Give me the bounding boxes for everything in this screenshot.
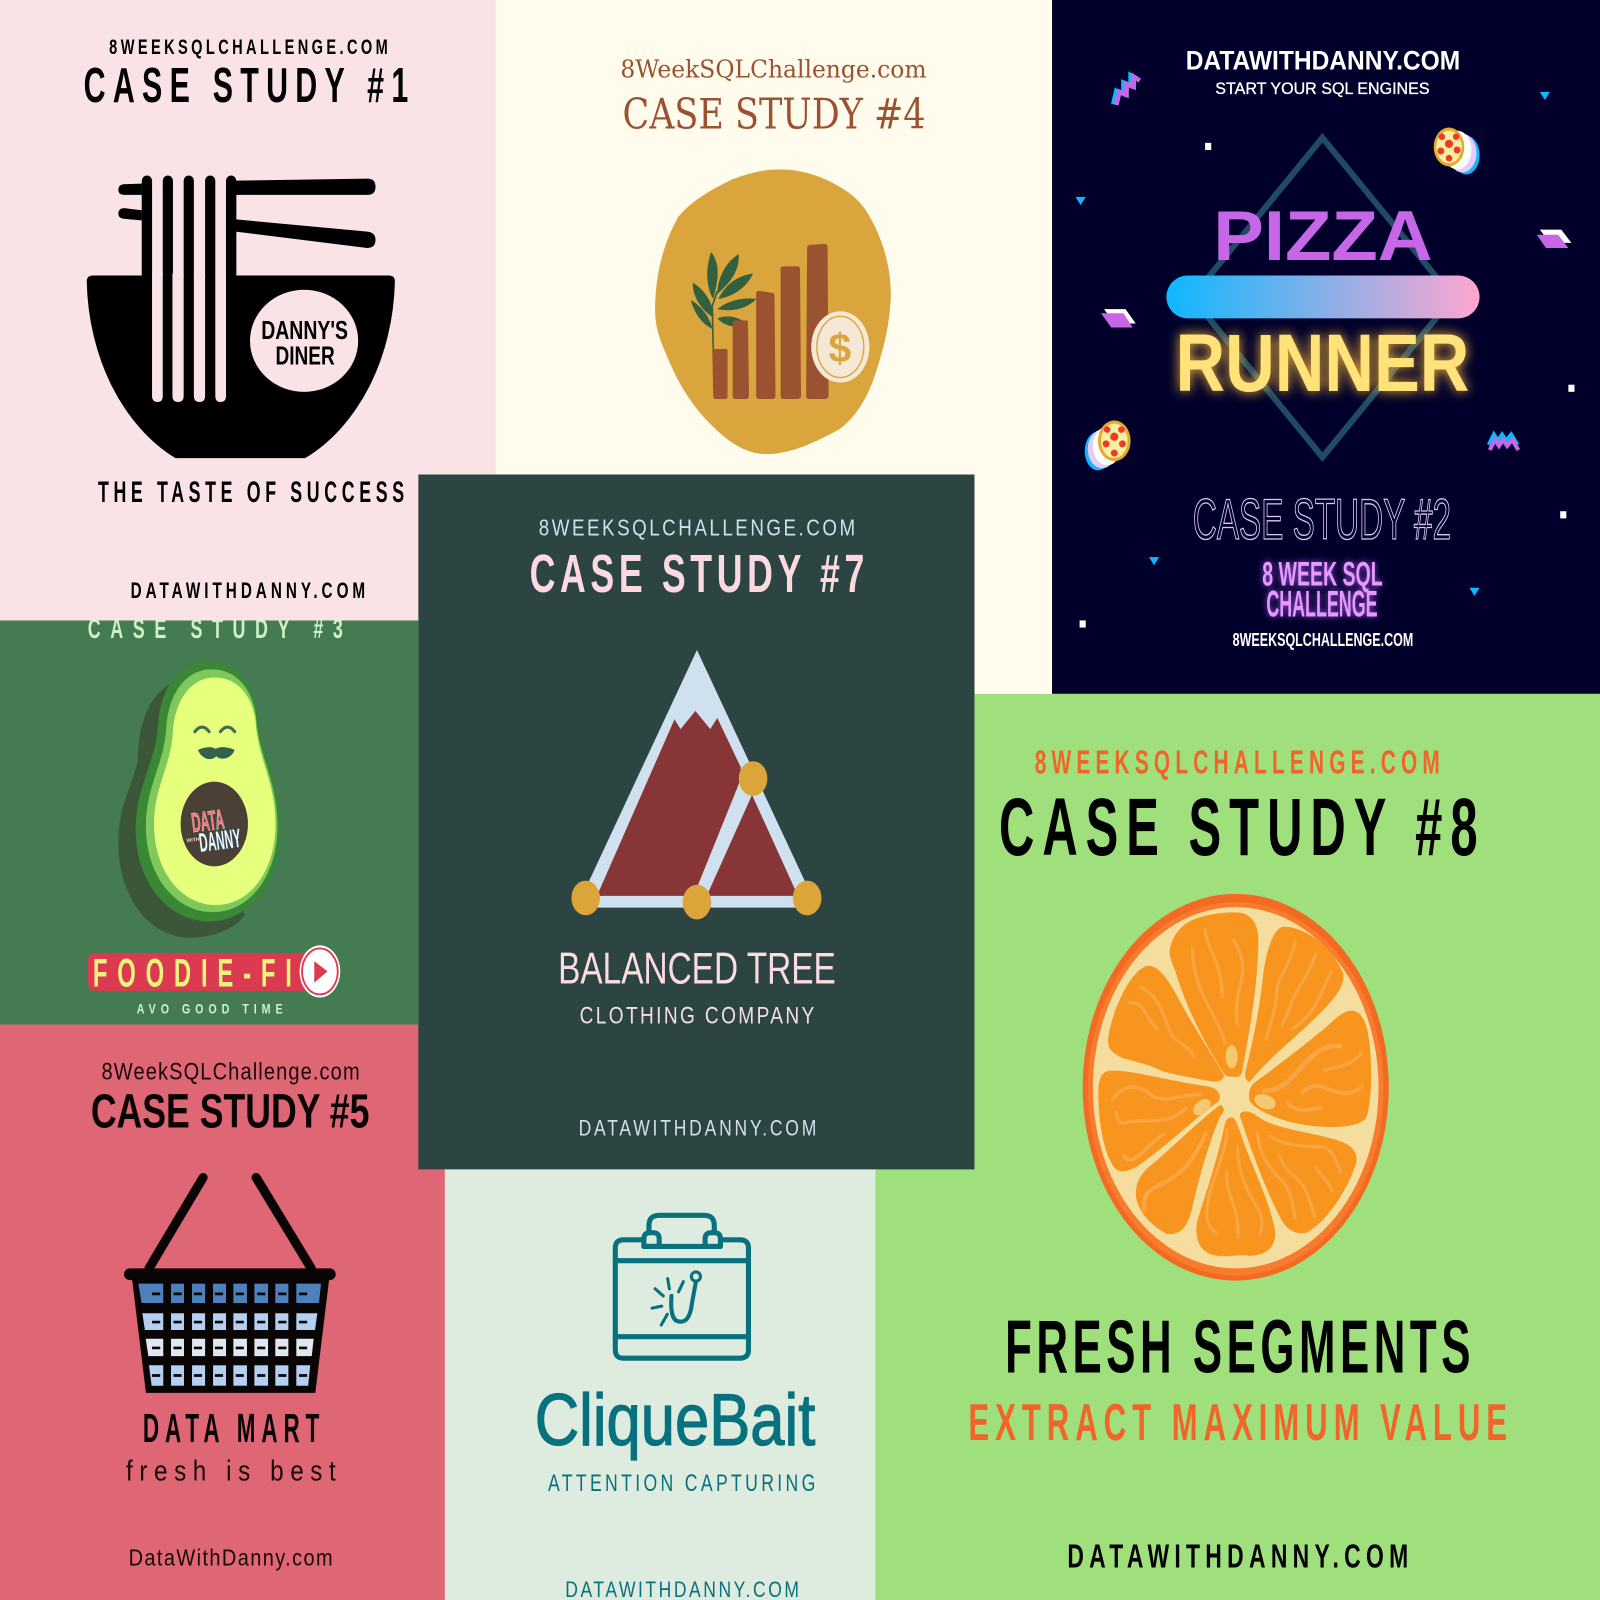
- icon: zigzag top left: [1113, 76, 1140, 105]
- brand name fresh segments: FRESH SEGMENTS: [1005, 1305, 1470, 1390]
- heading case study 1: CASE STUDY #1: [84, 58, 408, 113]
- panel: case study 7 Balanced Tree: [418, 474, 974, 1169]
- icon: noodle bowl logo: DINER: [276, 342, 335, 370]
- icon: avocado character: DANNY: [197, 823, 243, 858]
- website text datawithdanny: DATAWITHDANNY.COM: [1186, 45, 1460, 75]
- icon: parallelogram left: [1101, 309, 1136, 328]
- heading case study 8: CASE STUDY #8: [999, 782, 1478, 873]
- tagline avo good time: AVO GOOD TIME: [137, 1001, 283, 1017]
- website text case 1: 8WEEKSQLCHALLENGE.COM: [109, 34, 388, 59]
- panel: case study 5 Data Mart: [0, 1024, 445, 1600]
- heading case study 3: CASE STUDY #3: [88, 613, 343, 644]
- heading case study 5: CASE STUDY #5: [91, 1086, 369, 1139]
- icon: zigzag bottom right: [1489, 435, 1518, 450]
- brand name CliqueBait: CliqueBait: [535, 1378, 815, 1461]
- icon: mountain triangle with nodes: [571, 650, 821, 919]
- decorative diamond outline: [1192, 138, 1453, 457]
- icon: parallelogram right: [1537, 230, 1571, 248]
- icon: avocado character: DATA: [190, 803, 226, 838]
- website text datawithdanny case 1: DATAWITHDANNY.COM: [131, 579, 365, 604]
- glowing label 8 week sql challenge: 8 WEEK SQL: [1262, 556, 1383, 594]
- heading case study 4: CASE STUDY #4: [622, 90, 926, 139]
- tagline the taste of success: THE TASTE OF SUCCESS: [98, 477, 404, 509]
- icon: pizza top right: [1434, 128, 1480, 174]
- website text case 4: 8WeekSQLChallenge.com: [620, 55, 927, 84]
- website text case 5: 8WeekSQLChallenge.com: [102, 1058, 360, 1085]
- brand name data mart: DATA MART: [143, 1405, 319, 1451]
- gradient bar: [1166, 276, 1480, 318]
- glowing label 8 week sql challenge: [1262, 556, 1383, 624]
- icon: tackle box with fish hook: [615, 1215, 748, 1358]
- icon: bank bars, plant and coin: [655, 169, 891, 454]
- logo: Foodie-Fi banner: FOODIE-FI: [93, 950, 292, 995]
- panel: case study 3 Foodie-Fi: [0, 613, 418, 1024]
- panel: case study 8 Fresh Segments: [876, 694, 1600, 1600]
- icon: noodle bowl logo: [87, 176, 395, 458]
- website text datawithdanny case 7: DATAWITHDANNY.COM: [579, 1117, 816, 1141]
- panel: case study 2 Pizza Runner: [1052, 0, 1600, 694]
- brand name balanced tree: BALANCED TREE: [558, 943, 836, 994]
- icon: orange slice: [1083, 894, 1389, 1281]
- website text case 7: 8WEEKSQLCHALLENGE.COM: [539, 515, 855, 541]
- tagline clothing company: CLOTHING COMPANY: [580, 1001, 815, 1029]
- tagline extract maximum value: EXTRACT MAXIMUM VALUE: [968, 1394, 1507, 1452]
- website text case 8: 8WEEKSQLCHALLENGE.COM: [1035, 743, 1440, 781]
- panel: case study 4 Data Bank: [496, 0, 1052, 694]
- heading case study 7: CASE STUDY #7: [530, 543, 864, 604]
- icon: pizza bottom left: [1085, 420, 1131, 470]
- scattered white squares: [1080, 143, 1574, 628]
- icon: avocado character: WITH: [186, 837, 200, 844]
- icon: noodle bowl logo: DANNY'S: [261, 317, 348, 345]
- scattered cyan triangles: [1076, 92, 1550, 596]
- website text datawithdanny case 8: DATAWITHDANNY.COM: [1067, 1538, 1408, 1576]
- icon: avocado character: [118, 661, 281, 938]
- website text datawithdanny case 5: DataWithDanny.com: [129, 1544, 333, 1571]
- icon: shopping basket: [124, 1178, 336, 1393]
- website text 8weeksqlchallenge: 8WEEKSQLCHALLENGE.COM: [1233, 629, 1413, 650]
- tagline fresh is best: fresh is best: [126, 1455, 336, 1487]
- panel: case study 6 Clique Bait: [445, 1169, 876, 1600]
- title RUNNER with glow: RUNNER: [1176, 318, 1469, 409]
- icon: bank bars, plant and coin: $: [828, 325, 851, 371]
- glowing label 8 week sql challenge: CHALLENGE: [1266, 583, 1378, 624]
- title PIZZA: PIZZA: [1213, 196, 1433, 275]
- tagline start your sql engines: START YOUR SQL ENGINES: [1215, 80, 1430, 98]
- tagline attention capturing: ATTENTION CAPTURING: [548, 1469, 815, 1497]
- logo: Foodie-Fi banner: [88, 945, 340, 997]
- panel: case study 1 Danny's Diner: [0, 0, 496, 620]
